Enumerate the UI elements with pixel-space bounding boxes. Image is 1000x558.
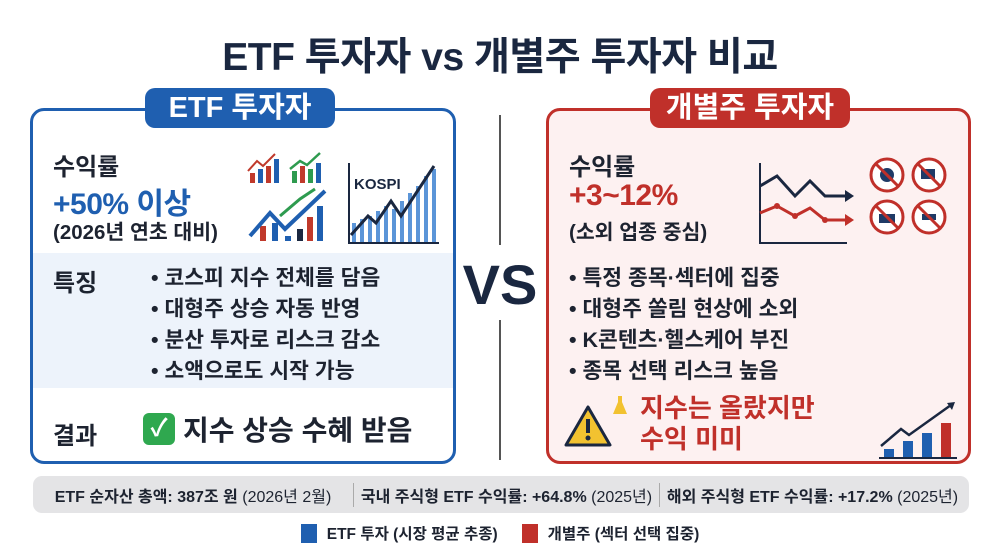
icon: warning xyxy=(564,405,612,446)
stats bar xyxy=(33,476,969,513)
legend xyxy=(301,524,699,543)
return note: (2026년 연초 대비) xyxy=(53,221,218,244)
stat: domestic: 국내 주식형 ETF 수익률: +64.8% (2025년) xyxy=(361,488,652,506)
icon: KOSPI chart: KOSPI xyxy=(354,176,401,193)
feature list xyxy=(152,266,380,383)
icon: small flask xyxy=(613,396,627,414)
warning text xyxy=(640,393,815,454)
features background xyxy=(33,253,453,388)
stat: overseas: 해외 주식형 ETF 수익률: +17.2% (2025년) xyxy=(667,488,958,506)
feature list: 분산 투자로 리스크 감소 xyxy=(165,328,380,352)
label: return: 수익률 xyxy=(569,154,635,181)
warning text: 수익 미미 xyxy=(640,424,743,454)
feature list: 대형주 쏠림 현상에 소외 xyxy=(583,297,798,321)
icon: falling lines chart xyxy=(759,163,854,244)
icon: rising charts xyxy=(247,152,326,241)
label: result: 결과 xyxy=(53,423,97,450)
title: ETF 투자자 vs 개별주 투자자 비교 xyxy=(222,36,778,79)
icon: KOSPI chart xyxy=(348,163,439,244)
divider top xyxy=(499,115,501,245)
feature list: 코스피 지수 전체를 담음 xyxy=(165,266,380,290)
legend: 개별주 (섹터 선택 집중) xyxy=(548,526,699,543)
label: return: 수익률 xyxy=(53,154,119,181)
result text with check icon: ✓ xyxy=(150,415,168,442)
result text with check icon: 지수 상승 수혜 받음 xyxy=(183,415,412,446)
feature list: 소액으로도 시작 가능 xyxy=(165,359,354,383)
return value: +50% 이상 xyxy=(53,188,191,221)
feature list: 특정 종목·섹터에 집중 xyxy=(583,266,780,290)
label: features: 특징 xyxy=(53,270,97,297)
header: individual investor: 개별주 투자자 xyxy=(666,92,834,124)
feature list: 종목 선택 리스크 높음 xyxy=(583,359,778,383)
panel: ETF investor xyxy=(30,108,456,464)
icon: rising bars xyxy=(879,402,957,459)
return value: +3~12% xyxy=(569,179,678,212)
icon: prohibited sectors xyxy=(870,158,946,234)
feature list xyxy=(570,266,798,383)
header: ETF investor xyxy=(145,88,335,128)
header: ETF investor: ETF 투자자 xyxy=(169,92,311,124)
stat: net assets: ETF 순자산 총액: 387조 원 (2026년 2월) xyxy=(55,488,331,506)
VS: VS xyxy=(463,253,537,316)
warning text: 지수는 올랐지만 xyxy=(640,393,815,423)
legend: ETF 투자 (시장 평균 추종) xyxy=(327,526,498,543)
panel: individual stock investor xyxy=(546,108,971,464)
return note: (소외 업종 중심) xyxy=(569,221,707,244)
feature list: 대형주 상승 자동 반영 xyxy=(165,297,360,321)
header: individual investor xyxy=(650,88,850,128)
feature list: K콘텐츠·헬스케어 부진 xyxy=(583,328,789,352)
divider bottom xyxy=(499,320,501,460)
